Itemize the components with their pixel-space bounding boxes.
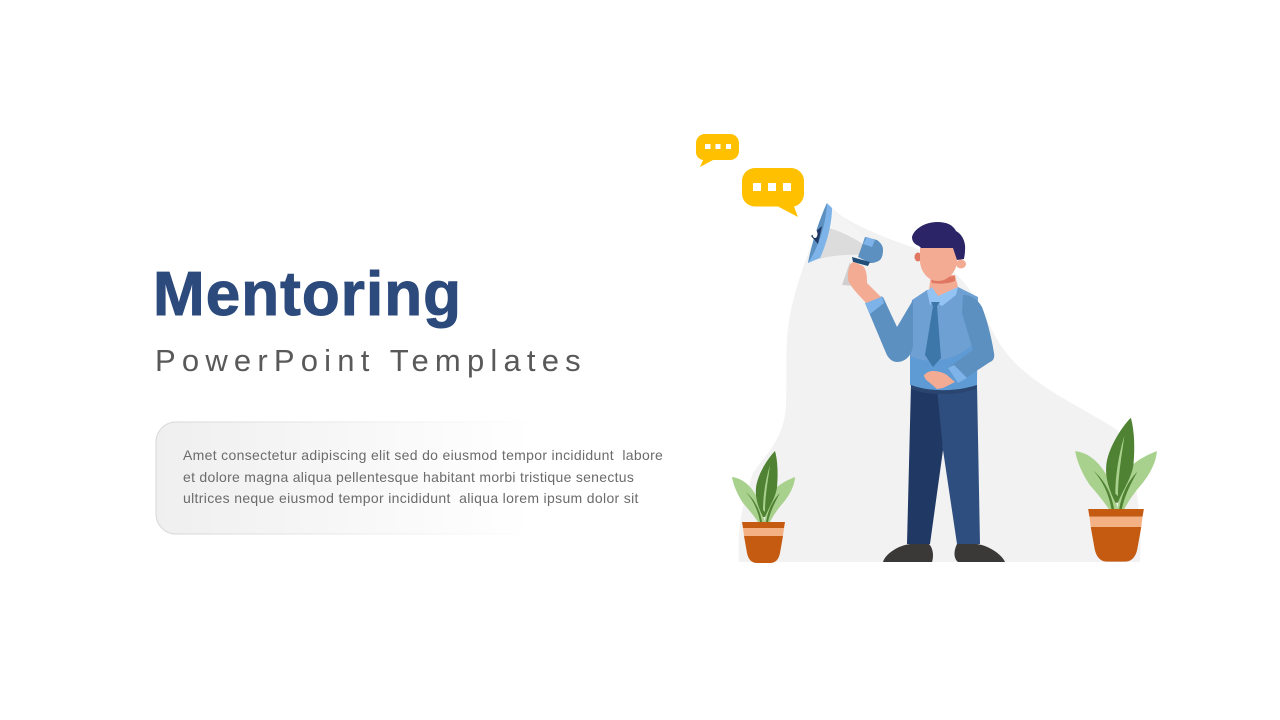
background blob	[739, 211, 1141, 562]
face	[920, 248, 957, 281]
neck	[929, 275, 958, 298]
subtitle: PowerPoint Templates	[155, 343, 587, 378]
shoes	[883, 544, 1005, 562]
icon: megaphone	[808, 203, 883, 286]
right arm	[948, 295, 994, 383]
description text: Amet consectetur adipiscing elit sed do eiusmod tempor incididunt labore	[183, 447, 663, 463]
hands	[924, 371, 955, 389]
plant: small	[732, 451, 795, 563]
description text: et dolore magna aliqua pellentesque habitant morbi tristique senectus	[183, 469, 634, 485]
ears	[914, 252, 966, 268]
hair	[912, 222, 965, 260]
icon: large speech bubble	[742, 168, 804, 217]
title: Mentoring	[153, 260, 462, 329]
collar	[927, 287, 958, 306]
icon: small speech bubble	[696, 134, 739, 167]
plant: large	[1075, 418, 1157, 562]
trousers	[907, 384, 980, 544]
neck shadow	[931, 276, 955, 284]
description text: ultrices neque eiusmod tempor incididunt aliqua lorem ipsum dolor sit	[183, 490, 639, 506]
figure: mentor	[848, 222, 1005, 562]
shirt	[910, 287, 978, 394]
description text	[183, 447, 663, 506]
panel: description background	[156, 422, 676, 534]
left arm	[848, 262, 913, 362]
necktie	[925, 302, 941, 367]
